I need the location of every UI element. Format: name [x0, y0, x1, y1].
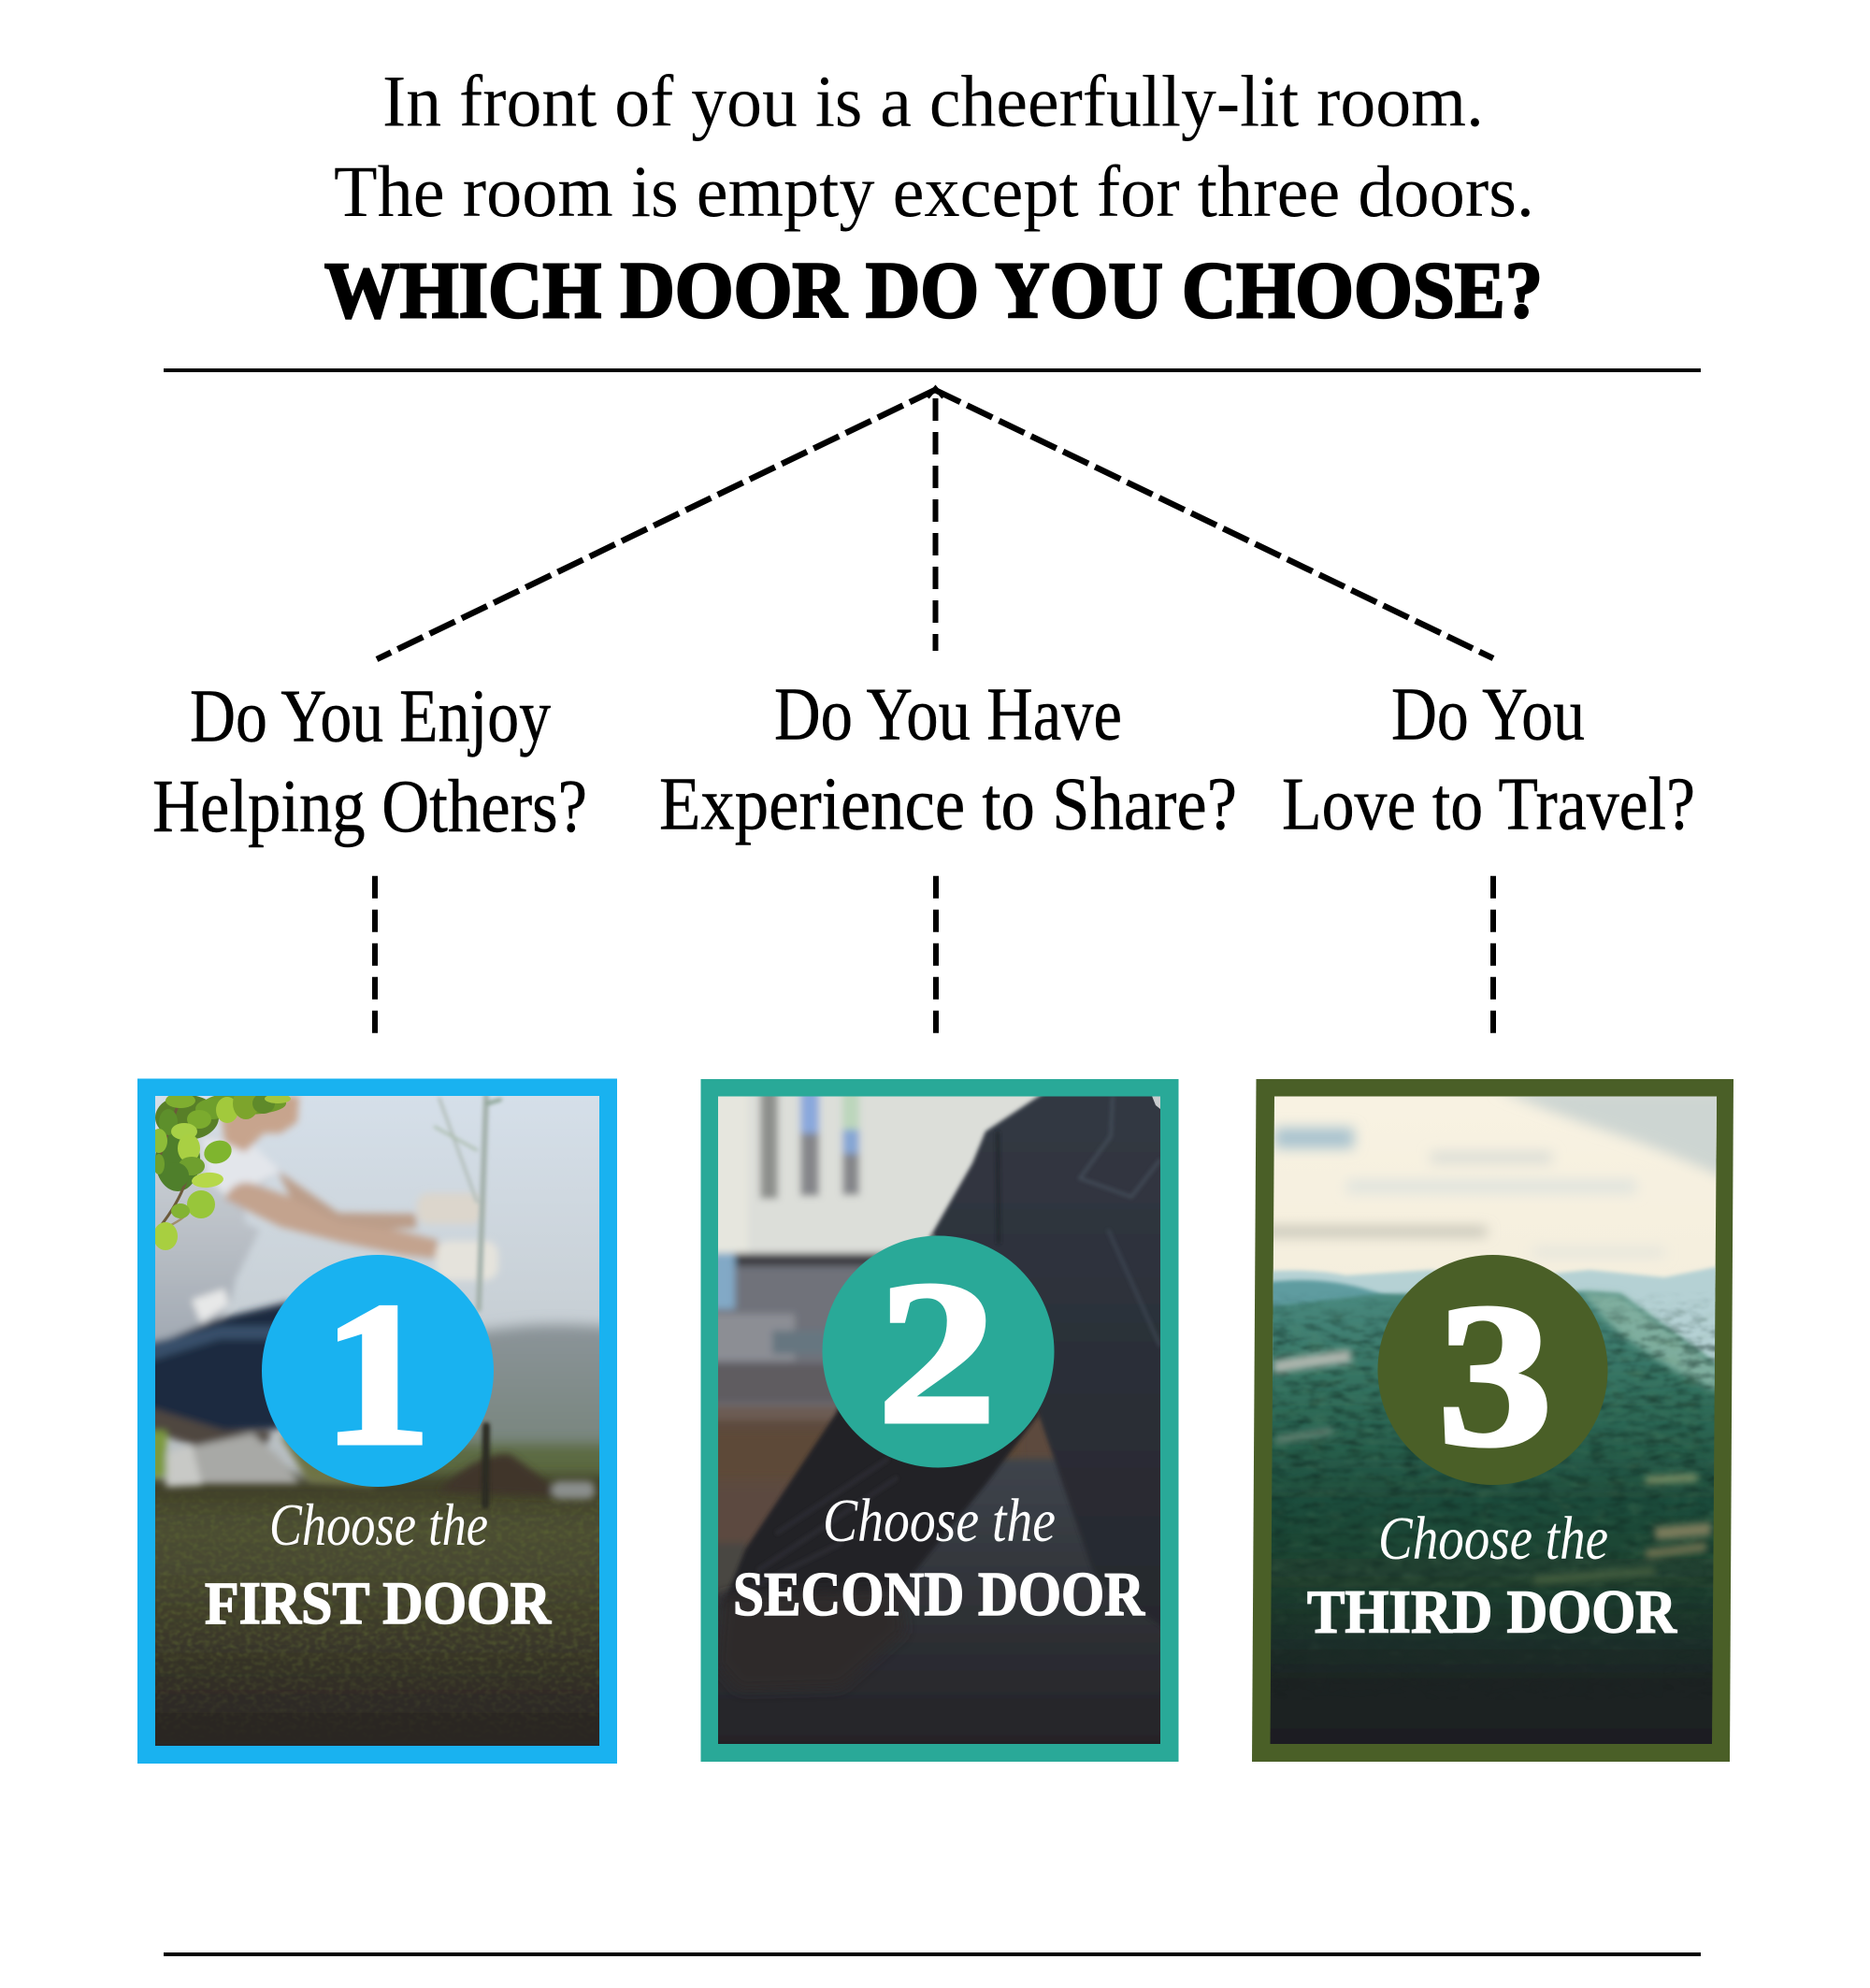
door 2 label: Choose the [823, 1487, 1056, 1555]
intro line 1: In front of you is a cheerfully-lit room. [382, 60, 1484, 142]
number badge 2: 2 [877, 1240, 997, 1466]
panel: door 1 [131, 1079, 636, 1764]
door 2 label [733, 1487, 1145, 1629]
number badge 1 [262, 1255, 494, 1488]
dashed connector to door 1 [372, 876, 378, 1033]
photo: businessperson in suit [718, 1096, 1160, 1744]
branching dashed arrows [377, 388, 1493, 659]
dashed connector to door 3 [1490, 876, 1496, 1033]
blurred figure [148, 1096, 595, 1499]
door 3 label: THIRD DOOR [1307, 1578, 1677, 1646]
question: helping others: Helping Others? [152, 766, 587, 848]
number badge 2 [823, 1236, 1055, 1468]
bottom divider rule [164, 1952, 1701, 1956]
number badge 1: 1 [323, 1261, 431, 1488]
number badge 3: 3 [1438, 1262, 1552, 1489]
door 2 label: SECOND DOOR [733, 1560, 1145, 1629]
question: love to travel: Love to Travel? [1282, 763, 1695, 845]
question: helping others: Do You Enjoy [190, 675, 551, 757]
number badge 3 [1378, 1255, 1608, 1489]
door 3 label: Choose the [1378, 1505, 1608, 1573]
question: love to travel [1282, 673, 1695, 845]
dashed branch left [377, 390, 935, 659]
question: experience to share: Do You Have [774, 673, 1122, 756]
door 1 label: FIRST DOOR [205, 1570, 552, 1637]
question: experience to share [659, 673, 1237, 845]
dashed connector to door 2 [933, 876, 939, 1033]
question: love to travel: Do You [1391, 673, 1585, 756]
door 3 label [1307, 1505, 1677, 1646]
door 1 frame [137, 1079, 617, 1764]
dashed branch right [935, 390, 1493, 658]
dashed branch centre [933, 389, 939, 651]
intro heading [324, 60, 1543, 335]
question: helping others [152, 675, 587, 848]
photo: volunteer planting a tree [155, 1096, 599, 1746]
question: experience to share: Experience to Share? [659, 763, 1237, 845]
door 3 frame [1252, 1079, 1733, 1762]
intro line 2: The room is empty except for three doors. [334, 151, 1534, 232]
door 2 frame [701, 1079, 1178, 1762]
door 1 label: Choose the [269, 1491, 488, 1558]
main question: WHICH DOOR DO YOU CHOOSE? [324, 245, 1543, 335]
arrowhead at apex [928, 388, 943, 397]
photo: green mountains under cloudy sky [1262, 1089, 1730, 1758]
top divider rule [164, 368, 1701, 372]
panel: door 3 [1252, 1079, 1733, 1762]
leaves [151, 1088, 291, 1250]
door 1 label [205, 1491, 552, 1637]
panel: door 2 [654, 1079, 1178, 1762]
